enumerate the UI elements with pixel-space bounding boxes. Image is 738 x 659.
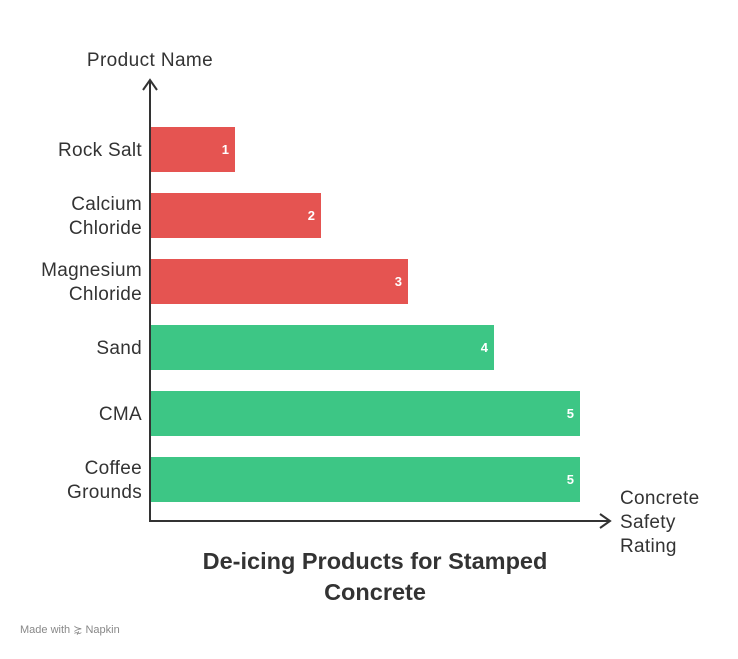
y axis arrow	[143, 80, 157, 522]
bar values: 3	[395, 274, 402, 289]
category labels: Chloride	[69, 284, 142, 305]
bar values	[222, 142, 574, 487]
chart title: Concrete	[324, 579, 426, 605]
bar values: 4	[481, 340, 489, 355]
category labels: CMA	[99, 404, 142, 425]
category labels: Grounds	[67, 482, 142, 503]
chart title: De-icing Products for Stamped	[203, 548, 547, 574]
x axis title: Rating	[620, 536, 677, 557]
category labels	[41, 140, 142, 503]
category labels: Coffee	[85, 458, 142, 479]
bar values: 5	[567, 472, 574, 487]
x axis title: Concrete	[620, 488, 700, 509]
category labels: Magnesium	[41, 260, 142, 281]
category labels: Sand	[96, 338, 142, 359]
bar values: 1	[222, 142, 229, 157]
category labels: Chloride	[69, 218, 142, 239]
bar values: 5	[567, 406, 574, 421]
bar values: 2	[308, 208, 315, 223]
x axis title: Safety	[620, 512, 676, 533]
y axis title: Product Name	[87, 50, 213, 71]
x axis arrow	[149, 514, 610, 528]
footer: Made with ⋩ Napkin	[20, 624, 120, 636]
category labels: Rock Salt	[58, 140, 142, 161]
bars	[151, 127, 580, 502]
category labels: Calcium	[71, 194, 142, 215]
